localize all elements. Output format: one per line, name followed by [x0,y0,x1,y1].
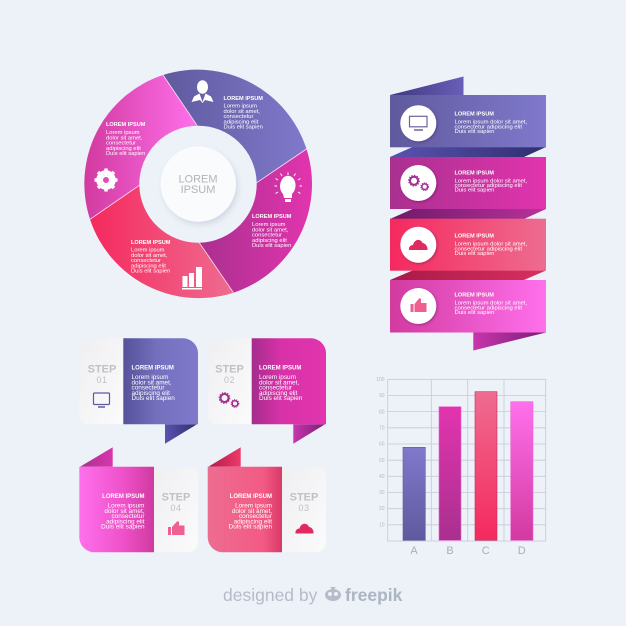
text: pink segment: consectetur [106,141,136,147]
footer: freepik credit [223,585,403,605]
y axis labels: 70 [379,426,385,432]
segment: rose [90,185,234,298]
band 3: LOREM IPSUM [454,234,494,240]
text: consectetur [239,513,273,520]
bar B [439,407,461,540]
band 4: LOREM IPSUM [454,293,494,299]
flap [208,447,241,467]
text: rose segment: adipiscing elit [131,263,166,269]
icon: light bulb [274,172,302,202]
step label: 02 [224,375,235,385]
x axis labels: B [446,545,454,557]
band 2 [390,157,546,209]
icon: cloud [295,524,314,534]
y axis labels: 60 [379,442,385,448]
icon: gears [219,393,239,407]
text: consectetur [132,385,165,392]
center label: IPSUM [181,184,215,196]
step label [88,364,116,385]
bottom flap [473,332,546,350]
flap [165,424,197,444]
text [101,494,145,531]
text: LOREM IPSUM [259,366,301,372]
band 2: Duis elit sapien [454,188,494,194]
footer: freepik credit: freepik [345,585,403,605]
icon: thumbs up [168,522,184,535]
text: purple segment [224,96,263,131]
fold 2 [390,209,546,219]
text: consectetur [111,513,145,520]
center label: LOREM [178,174,218,186]
segment: magenta [199,149,312,293]
text: pink segment: Duis elit sapien [106,151,145,157]
text: magenta segment [252,214,292,249]
text: Lorem ipsum [132,374,168,381]
text: purple segment: Duis elit sapien [224,125,263,131]
ribbon list [390,76,546,350]
text: Duis elit sapien [259,395,303,402]
text: purple segment: Lorem ipsum [224,104,257,110]
donut chart [84,70,312,298]
text: magenta segment: LOREM IPSUM [252,214,292,220]
text: pink segment: LOREM IPSUM [106,122,146,128]
icon: freepik mascot [325,587,341,601]
step label: 04 [170,503,182,513]
step label: STEP [88,364,116,376]
text: dolor sit amet, [232,508,272,515]
fold 3 [390,270,546,280]
center disc [161,146,236,222]
text: consectetur [259,385,293,392]
band 3: Duis elit sapien [454,251,494,257]
text [259,366,303,402]
band 3 [390,219,546,271]
band 3: consectetur adipiscing elit [454,246,522,252]
step label [162,492,190,513]
text: purple segment: consectetur [224,114,254,120]
text: dolor sit amet, [132,379,172,386]
text: pink segment: adipiscing elit [106,146,141,152]
bar C [475,392,497,540]
text [132,366,175,402]
text: adipiscing elit [259,390,298,397]
text: purple segment: dolor sit amet, [224,109,260,115]
text: rose segment: Duis elit sapien [131,269,170,275]
text: dolor sit amet, [259,379,299,386]
band 4: Lorem ipsum dolor sit amet, [454,301,527,307]
y axis labels: 30 [379,490,385,496]
icon: bars [182,267,202,290]
band 4: Duis elit sapien [454,310,494,316]
text: Lorem ipsum [108,502,144,510]
text: adipiscing elit [106,518,145,525]
text: purple segment: LOREM IPSUM [224,96,263,102]
text: rose segment [131,240,171,275]
text: purple segment: adipiscing elit [224,119,259,125]
band 2: LOREM IPSUM [454,170,494,176]
text: LOREM IPSUM [132,366,174,372]
y axis labels: 10 [379,522,385,528]
text: pink segment: Lorem ipsum [106,130,140,136]
bar A [403,447,425,540]
step label [215,364,244,385]
text: dolor sit amet, [104,508,145,515]
band 4 [390,280,546,332]
fold 1 [390,147,546,157]
y axis labels: 20 [379,506,385,512]
band 1: Lorem ipsum dolor sit amet, [454,120,527,126]
y axis labels: 40 [379,474,385,480]
text: Lorem ipsum [259,374,296,381]
icon: gear [94,168,118,192]
y axis labels: 100 [376,377,385,383]
step 04 card [79,447,198,552]
text: adipiscing elit [132,390,170,397]
icon: gears [400,165,436,201]
icon: cloud [400,227,436,263]
text: rose segment: dolor sit amet, [131,253,168,259]
band 1 [390,95,546,147]
text: magenta segment: Lorem ipsum [252,222,286,228]
band 3: Lorem ipsum dolor sit amet, [454,242,527,248]
text: Duis elit sapien [229,524,272,531]
text: magenta segment: adipiscing elit [252,238,287,244]
icon: monitor [94,393,110,407]
footer: freepik credit: designed by [223,585,318,605]
icon: person [192,80,214,103]
band 1: LOREM IPSUM [454,112,494,118]
top flap [390,76,464,95]
flap [293,424,325,444]
text: Duis elit sapien [101,524,145,531]
text: rose segment: LOREM IPSUM [131,240,171,246]
step label: STEP [290,492,318,504]
text: rose segment: Lorem ipsum [131,248,165,254]
band 1: consectetur adipiscing elit [454,124,522,130]
text: Lorem ipsum [235,502,272,510]
segment: pink [84,75,197,219]
step 03 card [208,447,326,552]
step 01 card [79,338,198,444]
segment: purple [163,70,306,183]
flap [80,447,113,467]
band 1: Duis elit sapien [454,129,494,135]
text: Duis elit sapien [132,395,175,402]
band 2: Lorem ipsum dolor sit amet, [454,178,527,184]
text: LOREM IPSUM [102,494,144,500]
text: magenta segment: consectetur [252,233,282,239]
y axis labels: 50 [379,458,385,464]
text: adipiscing elit [234,518,272,525]
x axis labels: C [482,545,490,557]
x axis labels: A [410,545,418,557]
step label: 01 [96,375,108,385]
icon: monitor [400,105,436,141]
step label: 03 [298,503,310,513]
step label: STEP [215,364,244,376]
text [229,494,273,531]
bar chart [376,377,546,557]
text: LOREM IPSUM [230,494,272,500]
y axis labels: 80 [379,410,385,416]
y axis labels [376,377,385,528]
text: magenta segment: dolor sit amet, [252,227,289,233]
y axis labels: 90 [379,393,385,399]
step 02 card [208,338,326,444]
band 2: consectetur adipiscing elit [454,183,522,189]
text: magenta segment: Duis elit sapien [252,243,291,249]
text: pink segment: dolor sit amet, [106,135,143,141]
icon: thumbs up [400,288,436,324]
text: rose segment: consectetur [131,258,161,264]
x axis labels: D [518,545,526,557]
step label: STEP [162,492,190,504]
step label [290,492,318,513]
bar D [511,402,533,540]
text: pink segment [106,122,146,157]
x axis labels [410,545,526,557]
band 4: consectetur adipiscing elit [454,305,522,311]
